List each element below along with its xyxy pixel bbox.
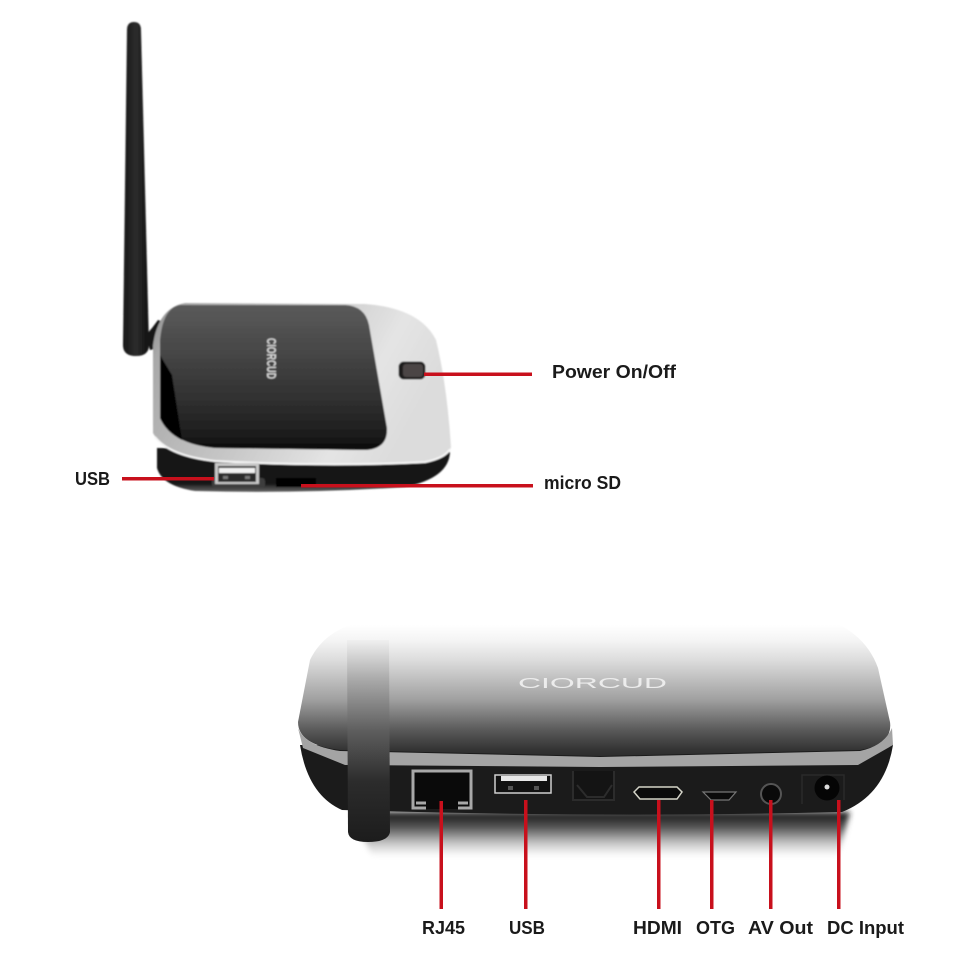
callout: USB side: USB — [75, 469, 110, 489]
callout: micro SD — [301, 473, 621, 493]
icon: power button — [398, 361, 426, 380]
icon: DC jack — [802, 775, 844, 804]
lower black band — [157, 448, 450, 492]
black lid — [160, 305, 387, 450]
silver trim line — [298, 728, 893, 767]
drop shadow under device — [352, 812, 850, 856]
icon: OTG port — [703, 792, 736, 800]
callout: HDMI — [633, 800, 682, 938]
callout: Power On/Off — [424, 362, 677, 382]
callout: USB rear: USB — [509, 918, 545, 938]
bottom device: rear view of TV box — [298, 625, 893, 856]
antenna front — [347, 640, 390, 842]
callout: Power On/Off: Power On/Off — [552, 362, 677, 382]
callout: AV Out: AV Out — [748, 918, 813, 938]
fading lid — [298, 625, 890, 756]
callout: OTG — [696, 800, 735, 938]
antenna — [123, 22, 164, 356]
callout: DC Input — [827, 800, 904, 938]
icon: optical port — [573, 771, 614, 800]
icon: USB port on side — [212, 463, 265, 488]
callout: DC Input: DC Input — [827, 918, 904, 938]
rear ports band — [300, 745, 893, 815]
silver body — [153, 303, 451, 465]
logo on rear lid: CIORCUD — [518, 675, 667, 692]
top device: angled view of TV box — [123, 22, 451, 492]
callout: HDMI: HDMI — [633, 918, 682, 938]
icon: RJ45 port — [412, 770, 472, 809]
callout: AV Out — [748, 800, 813, 938]
logo on lid: CIORCUD — [264, 338, 279, 379]
icon: HDMI port — [634, 787, 682, 799]
callout: RJ45: RJ45 — [422, 918, 465, 938]
icon: AV jack — [761, 784, 781, 804]
callout: micro SD: micro SD — [544, 473, 621, 493]
icon: micro SD slot — [276, 478, 316, 487]
callout: RJ45 — [422, 801, 465, 938]
callout: OTG: OTG — [696, 918, 735, 938]
icon: USB port — [495, 775, 551, 793]
callout: USB rear — [509, 800, 545, 938]
callout: USB side — [75, 469, 214, 489]
